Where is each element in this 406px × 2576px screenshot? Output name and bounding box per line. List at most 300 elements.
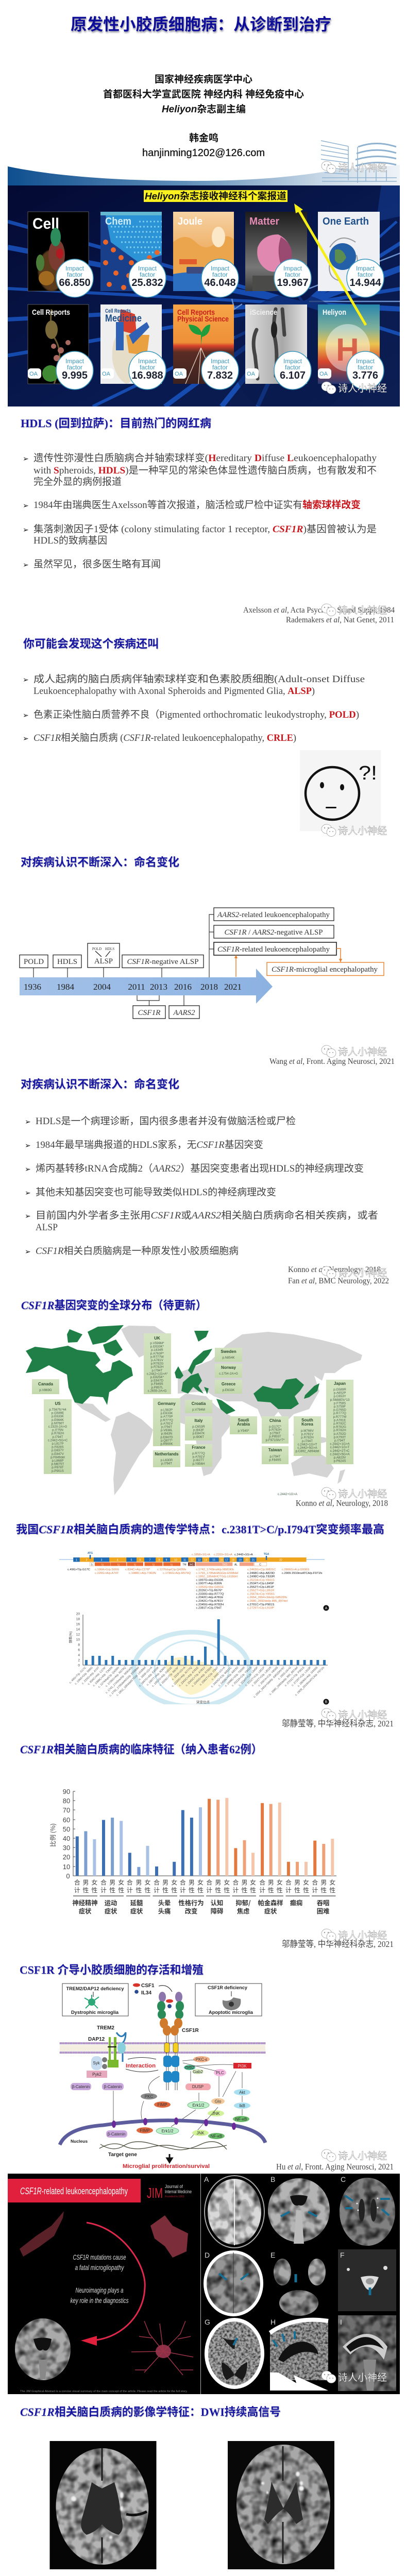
mutation box: US: p.T567fs*44 xyxy=(49,1408,66,1412)
box labels: AARS2 xyxy=(173,1009,195,1017)
x axis labels: c. 2468C>A/p. A823D xyxy=(218,1666,239,1687)
y axis labels xyxy=(63,1788,70,1880)
mutation box: Japan: p.R777Q xyxy=(333,1412,346,1415)
references: HDLS xyxy=(243,606,395,624)
cover: Cell Reports xyxy=(28,304,89,384)
box labels: POLD xyxy=(92,947,102,951)
impact factor badges: Impact xyxy=(211,358,230,365)
MRI panel D xyxy=(204,2250,263,2316)
box labels: CSF1R / AARS2-negative ALSP xyxy=(225,928,323,937)
mutation boxes: UK, Sweden, Norway, Greece, Canada xyxy=(32,1333,242,1394)
MRI panel C xyxy=(340,2175,395,2246)
deficiency box: CSF1R: Apoptotic microglia xyxy=(209,2010,253,2015)
MRI panel B: B xyxy=(270,2175,275,2183)
watermarks: 诗人小神经 xyxy=(338,1486,387,1500)
mutation boxes: Saudi Arabia, China, Taiwan, South Korea: p.P855T xyxy=(269,1435,281,1438)
mutation boxes: Saudi Arabia, China, Taiwan, South Korea: p.F849S xyxy=(269,1459,281,1462)
group labels: 认知 xyxy=(211,1898,223,1907)
mutation boxes: Saudi Arabia, China, Taiwan, South Korea: p.A781V xyxy=(301,1433,314,1436)
connector lines xyxy=(33,914,214,1006)
TREM2 and DAP12: Syk xyxy=(93,2061,100,2065)
heading: naming changes: 对疾病认识不断深入：命名变化 xyxy=(21,856,179,869)
impact factor badges xyxy=(56,259,384,389)
mutation box: US: p.P901S xyxy=(52,1469,64,1473)
mutation boxes: Saudi Arabia, China, Taiwan, South Korea: p.G17C* xyxy=(269,1425,281,1429)
OA badges: OA xyxy=(102,371,111,377)
impact factor badges: Impact xyxy=(138,358,157,365)
impact factor badges: factor xyxy=(358,271,373,278)
x axis labels: c. 1907T>A/p. I636N xyxy=(146,1666,166,1686)
mutation boxes: UK, Sweden, Norway, Greece, Canada: Canada xyxy=(38,1382,53,1386)
mutation boxes: UK, Sweden, Norway, Greece, Canada: p.A781V xyxy=(151,1359,164,1362)
x axis labels: c. 2026C>T/p. R676* xyxy=(159,1666,180,1687)
y axis labels: 8 xyxy=(78,1643,80,1647)
group labels: 神经精神 xyxy=(72,1898,98,1907)
mutation boxes: UK, Sweden, Norway, Greece, Canada: c.1754-2A>G xyxy=(219,1372,238,1376)
impact factor badges: Impact xyxy=(356,265,375,272)
impact factor badges: Impact xyxy=(211,265,230,272)
group labels: 障碍 xyxy=(211,1906,223,1916)
mutation lists: c.2498C>G/p.T833R xyxy=(247,1575,275,1579)
group labels: 抑郁/ xyxy=(235,1898,251,1907)
y axis labels: 16 xyxy=(76,1623,80,1626)
panel: journal covers xyxy=(8,185,402,417)
bullet list: other names: ➢ xyxy=(23,711,29,720)
mutation box: US: c.2442+5G>C xyxy=(48,1438,68,1442)
mutation boxes: Germany, Netherlands, Croatia, Italy, France: p.A781V xyxy=(161,1422,173,1426)
bullet list: other names: Leukoencephalopathy with Axonal Spheroids and Pigmented Glia, ALSP) xyxy=(33,686,315,697)
y axis labels: 30 xyxy=(63,1844,70,1852)
start and stop markers: TGA xyxy=(264,1553,269,1556)
x axis labels: c. 2498C>G/p. T833R xyxy=(225,1666,246,1688)
protein domain bar: Ig xyxy=(153,1563,155,1566)
axes xyxy=(83,1615,328,1665)
mutation boxes: Germany, Netherlands, Croatia, Italy, France xyxy=(153,1398,212,1467)
mutation boxes: Germany, Netherlands, Croatia, Italy, France: p.V784M xyxy=(192,1408,205,1412)
mutation lists: c.2552T>C/p.L851P xyxy=(247,1586,274,1589)
x axis labels: c. 2342C>T/p. A781V xyxy=(185,1666,206,1687)
mutation lists: c.2463G>C/p.W821C xyxy=(247,1568,276,1571)
cover: Cell Reports Medicine: Cell Reports xyxy=(105,308,131,314)
box labels: CSF1R xyxy=(138,1009,161,1017)
signalling molecules: PKC-ε xyxy=(196,2057,208,2062)
start and stop markers: c.2442+1G>A xyxy=(234,1553,253,1556)
mutation boxes: UK, Sweden, Norway, Greece, Canada: p.E847D xyxy=(151,1379,164,1383)
watermarks: 诗人小神经 xyxy=(338,1044,387,1058)
reference: Wang 2021: Wang et al, Front. Aging Neurosci, 2021 xyxy=(269,1057,395,1066)
x axis labels: c. 2319+1G>A xyxy=(172,1666,187,1681)
bullet list: naming: 烯丙基转移tRNA合成酶2（AARS2）基因突变患者出现HDLS的神经病理改变 xyxy=(36,1163,364,1174)
coronal brain xyxy=(15,2318,71,2380)
mutation lists: c.2654_2654+3del/p.G852Dfs xyxy=(247,1596,287,1599)
year labels: 2016 xyxy=(174,982,192,992)
box labels: CSF1R-microglial encephalopathy xyxy=(272,965,378,974)
MRI panel I: I xyxy=(340,2318,342,2326)
mutation box: Japan: p.R782H xyxy=(333,1429,346,1432)
cover: Matter xyxy=(245,212,307,291)
signalling molecules: Akt xyxy=(239,2090,246,2095)
watermarks: 诗人小神经 xyxy=(338,603,387,617)
protein domain bar: S xyxy=(91,1563,93,1566)
bullet list: naming: 其他未知基因突变也可能导致类似HDLS的神经病理改变 xyxy=(36,1187,276,1198)
mutation lists: c.220G>A/p.A74T xyxy=(95,1572,119,1575)
impact factor badges: Impact xyxy=(65,358,84,365)
CSF1R receptor xyxy=(157,1992,184,2090)
y axis labels: 70 xyxy=(63,1806,70,1814)
mutation boxes: UK, Sweden, Norway, Greece, Canada: p.V869G xyxy=(39,1388,52,1392)
mutation boxes: UK, Sweden, Norway, Greece, Canada: Greece xyxy=(222,1382,236,1386)
x axis labels: c. 2534T>C/p. L845P xyxy=(238,1666,259,1687)
mutation boxes: UK, Sweden, Norway, Greece, Canada: p.E633K xyxy=(223,1388,235,1392)
mutation box: Japan xyxy=(326,1380,353,1464)
exon bar: 14 xyxy=(204,1559,207,1562)
mutation boxes: UK, Sweden, Norway, Greece, Canada: p.N854K xyxy=(222,1356,235,1360)
heading: other names: 你可能会发现这个疾病还叫 xyxy=(23,637,159,650)
mutation box: Japan: c.2442+1G>T xyxy=(330,1446,350,1449)
box labels: HDLS xyxy=(105,947,114,951)
signalling molecules: PLC xyxy=(216,2071,224,2075)
references: HDLS: Axelsson et al, Acta Psychiatr Scand Suppl, 1984 xyxy=(243,606,395,615)
bullet list: other names: 成人起病的脑白质病伴轴索球样变和色素胶质细胞(Adult-onset Diffuse xyxy=(33,673,365,685)
MRI panel C: C xyxy=(341,2175,346,2183)
signalling molecules: Gab2 xyxy=(193,2070,203,2074)
mutation box: US: p.P878T xyxy=(52,1466,64,1469)
x axis labels: c. 1858+1G>A xyxy=(138,1666,154,1681)
MRI panel F xyxy=(338,2249,396,2311)
impact factor badges: 3.776 xyxy=(352,370,378,381)
blue swoosh footer of title slide xyxy=(8,165,400,185)
DWI scan: Karolinska case xyxy=(228,2441,334,2569)
mutation boxes: Germany, Netherlands, Croatia, Italy, France: p.C653R xyxy=(192,1425,205,1429)
y axis labels: 20 xyxy=(76,1613,80,1616)
arrow: yellow pointer to Heliyon xyxy=(294,204,366,325)
mutation lists: c.1276dupC/p.Q426fs xyxy=(157,1568,186,1571)
x axis labels: c. 2345G>A/p. R782H xyxy=(191,1666,213,1688)
year labels: 2004 xyxy=(93,982,111,992)
cover: Chem: Chem xyxy=(105,216,131,227)
OA badges: OA xyxy=(319,371,328,377)
year labels: 2018 xyxy=(200,982,218,992)
signalling molecules: IkB xyxy=(239,2104,245,2108)
mutation boxes: Germany, Netherlands, Croatia, Italy, France: France xyxy=(192,1445,206,1450)
x axis labels: c. 220G>A/p. A74T xyxy=(81,1666,100,1685)
y axis labels: 10 xyxy=(63,1863,70,1871)
reference: Zou 2021: 邬静莹等, 中华神经科杂志, 2021 xyxy=(282,1939,394,1949)
mutation lists: c.2567A>C/p.Y856S xyxy=(247,1593,275,1596)
group labels: 症状 xyxy=(264,1906,277,1916)
group labels: 焦虑 xyxy=(237,1906,249,1916)
bullet list: naming: ALSP xyxy=(36,1222,58,1233)
panel: JIM graphical abstract xyxy=(8,2174,400,2394)
group labels: 性格行为 xyxy=(178,1898,204,1907)
mutation boxes: UK, Sweden, Norway, Greece, Canada: p.R777W xyxy=(150,1355,164,1359)
mutation lists: c.2522A>C/p.Y841S xyxy=(247,1579,275,1582)
DWI scan: Xuanwu case xyxy=(49,2441,157,2569)
mutation boxes: Saudi Arabia, China, Taiwan, South Korea: p.R782H xyxy=(269,1428,281,1432)
x axis labels: c. 196A>G/p. S66G xyxy=(74,1666,94,1686)
y axis labels xyxy=(76,1613,80,1667)
y axis labels: 20 xyxy=(63,1853,70,1861)
group labels: 头痛 xyxy=(158,1906,171,1916)
red title banner xyxy=(8,2179,141,2202)
DNA wireframe xyxy=(20,2211,64,2257)
CT panel G: G xyxy=(205,2318,210,2326)
group labels: 吞咽 xyxy=(317,1898,329,1907)
CT panel H xyxy=(270,2318,328,2391)
deficiency box: TREM2/DAP12: TREM2/DAP12 deficiency xyxy=(66,1986,124,1991)
mutation box: Japan: p.P824S xyxy=(334,1460,346,1463)
protein domain bar: TKD xyxy=(222,1563,227,1566)
CT panel H: H xyxy=(270,2318,276,2326)
nuclear proteins: β-Catenin xyxy=(108,2132,125,2137)
mutation boxes: UK, Sweden, Norway, Greece, Canada: p.R782G xyxy=(151,1362,164,1366)
cover: Cell Reports Physical Science: Physical Science xyxy=(177,315,229,324)
x axis labels: c. 1897G>A/p. E633K xyxy=(139,1666,160,1687)
mutation lists xyxy=(67,1568,323,1610)
mutation frequency bar chart xyxy=(68,1613,329,1706)
impact factor badges: Impact xyxy=(138,265,157,272)
mutation boxes: Saudi Arabia, China, Taiwan, South Korea: c.2442+1G>T xyxy=(298,1443,317,1446)
group labels: 改变 xyxy=(185,1906,197,1916)
y axis labels: 6 xyxy=(78,1649,80,1652)
cover: Cell Reports Medicine: Medicine xyxy=(105,313,142,324)
heading: DWI: CSF1R相关脑白质病的影像学特征：DWI持续高信号 xyxy=(20,2405,281,2418)
ligand legend xyxy=(133,1983,172,1996)
mutation boxes: Saudi Arabia, China, Taiwan, South Korea: South xyxy=(301,1418,313,1422)
bullet list: naming: 目前国内外学者多主张用 CSF1R或AARS2相关脑白质病命名相关疾病，或者 xyxy=(36,1210,378,1221)
signalling molecules: NF-κB xyxy=(235,2117,247,2122)
mutation box: Japan: c.2442+1G>A xyxy=(330,1443,350,1446)
impact factor badges: 14.944 xyxy=(349,277,381,289)
mutation boxes: Germany, Netherlands, Croatia, Italy, France: Italy xyxy=(194,1418,203,1423)
mutation boxes: Germany, Netherlands, Croatia, Italy, France: p.L630R xyxy=(161,1459,173,1462)
impact factor badges: Impact xyxy=(283,265,302,272)
exon bar: 4 xyxy=(117,1559,119,1562)
exon bar: 16 xyxy=(220,1559,223,1562)
group labels: 困难 xyxy=(317,1906,329,1916)
bullet list: naming: ➢ xyxy=(25,1142,31,1150)
MRI panel I xyxy=(338,2315,396,2391)
gene mutation diagram xyxy=(59,1552,329,1611)
mutation box: Japan: p.F758S xyxy=(334,1401,346,1405)
cover: Matter: Matter xyxy=(249,216,279,227)
mutation box: US: p.F828S xyxy=(52,1446,64,1449)
mutation boxes: Germany, Netherlands, Croatia, Italy, France: p.R777Q xyxy=(192,1452,205,1455)
interaction label xyxy=(126,2058,158,2072)
MRI panel A xyxy=(204,2175,264,2248)
mutation boxes: Germany, Netherlands, Croatia, Italy, France: p.I843F xyxy=(193,1429,204,1432)
mutation lists: c.1952G>A/p.G651E xyxy=(196,1586,224,1589)
light rays xyxy=(8,222,402,406)
mutation box: US: p.G589E xyxy=(52,1412,64,1415)
x axis labels: c. 1736G>A/p. R579Q xyxy=(105,1666,127,1688)
nuclear proteins xyxy=(71,2117,236,2144)
watermarks: 诗人小神经 xyxy=(338,1707,387,1721)
impact factor badges: 46.048 xyxy=(204,277,236,289)
x axis labels: c. 1276dupC/p. Q426fs xyxy=(98,1666,120,1689)
exon bar: 22 xyxy=(279,1559,282,1562)
JIM logo: Journal of xyxy=(165,2184,183,2189)
y axis labels: 40 xyxy=(63,1835,70,1842)
cover: Heliyon: Heliyon xyxy=(323,308,346,317)
cover: Joule xyxy=(173,212,234,291)
mutation boxes: Saudi Arabia, China, Taiwan, South Korea: p.F971Sfs*7* xyxy=(266,1438,285,1442)
mutation frequency bar chart: 突变位点 xyxy=(196,1700,210,1704)
bullet list: HDLS: with Spheroids, HDLS)是一种罕见的常染色体显性遗传脑白质病，也有散发和不 xyxy=(33,465,377,476)
protein domain bar: C xyxy=(259,1563,261,1566)
cover: Chem xyxy=(100,212,162,291)
clinical features bar chart xyxy=(48,1788,336,1916)
mutation lists: c.2909 2910insATCA/p.F971fs xyxy=(282,1572,323,1575)
mutation boxes: Germany, Netherlands, Croatia, Italy, France: p.I827T xyxy=(193,1459,204,1462)
group labels: 运动 xyxy=(105,1898,117,1907)
mutation boxes: Saudi Arabia, China, Taiwan, South Korea: p.Y540* xyxy=(238,1429,249,1433)
mutation box: US: p.D837Y xyxy=(52,1449,64,1452)
x axis labels: c. 2522A>C/p. Y841S xyxy=(231,1666,252,1687)
exon bar: 2 xyxy=(86,1559,88,1562)
mutation lists: c.2330G>A/p.R777Q xyxy=(196,1593,224,1596)
OA badges: OA xyxy=(29,371,38,377)
x axis labels: c. 2680_2692del/p. 895_897del xyxy=(269,1666,299,1696)
group labels: 症状 xyxy=(79,1906,92,1916)
mutation boxes: Germany, Netherlands, Croatia, Italy, France: Croatia xyxy=(192,1401,206,1406)
axes xyxy=(73,1791,336,1876)
deficiency box: TREM2/DAP12 xyxy=(62,1984,128,2016)
bullet list: naming: 1984年最早瑞典报道的HDLS家系，无CSF1R基因突变 xyxy=(36,1139,263,1150)
signalling molecules: Grb2 xyxy=(185,2065,194,2070)
exon bar: 1 xyxy=(76,1559,77,1562)
mutation box: US: p.M766T xyxy=(52,1421,64,1425)
pathway arrows xyxy=(113,2060,242,2138)
start and stop markers: c.2319+1G>A xyxy=(214,1553,232,1556)
x axis labels: c. 1852_1854delCTG/p. L618del xyxy=(116,1666,146,1697)
mutation box: Japan: c.2442+5G>A xyxy=(330,1452,350,1456)
MRI panel F: F xyxy=(340,2251,345,2259)
mutation lists: c.1742_1743insA/p.N581Kfs xyxy=(196,1568,234,1571)
x axis labels: c. 2654_2654+3del/p. G852Dfs*97 xyxy=(253,1666,285,1699)
bullet list: other names xyxy=(23,673,365,743)
group labels: 延髓 xyxy=(130,1898,143,1907)
mutation boxes: Saudi Arabia, China, Taiwan, South Korea: Korea xyxy=(301,1422,313,1427)
mutation box: Japan: p.R782C xyxy=(333,1422,346,1426)
signalling molecules: JNK xyxy=(212,2111,220,2116)
mutation frequency bar chart: B xyxy=(325,1700,328,1704)
protein wireframe xyxy=(150,2215,188,2258)
mutation lists: c.834C>A/p.C278* xyxy=(125,1568,150,1571)
x axis labels: c. 2806G>A/p. G936S xyxy=(297,1666,318,1688)
mutation box: US: p.L868P xyxy=(52,1459,64,1463)
mutation box: US: p.R782H xyxy=(52,1432,64,1435)
impact factor badges: Impact xyxy=(283,358,302,365)
exon bar: 8 xyxy=(159,1559,160,1562)
mutation box: Japan: p.S688Efs*13 xyxy=(330,1398,350,1402)
deficiency box: CSF1R xyxy=(195,1984,262,2016)
mutation box: Japan: c.2442+2T>C xyxy=(330,1449,350,1453)
impact factor badges: 6.107 xyxy=(280,370,306,381)
mutation boxes: UK, Sweden, Norway, Greece, Canada: Sweden xyxy=(221,1349,236,1354)
x axis labels: c. 49G>T/p. G17C xyxy=(69,1666,87,1684)
OA badges: OA xyxy=(175,371,183,377)
exon bar: 21 xyxy=(252,1559,255,1562)
x axis labels: c. 2330G>A/p. R777Q xyxy=(171,1666,193,1688)
signalling molecules: β-Catenin xyxy=(72,2084,90,2089)
OA badges: OA xyxy=(247,371,256,377)
nuclear proteins: NF-κB xyxy=(211,2134,222,2139)
mutation lists: c.2806G>A p.G936S xyxy=(282,1568,309,1571)
mutation box: Japan: p.A792D xyxy=(333,1432,346,1436)
mutation boxes: UK, Sweden, Norway, Greece, Canada: p.F849S xyxy=(151,1382,163,1386)
mutation boxes: Saudi Arabia, China, Taiwan, South Korea: p.I794T xyxy=(302,1439,313,1443)
year labels: 1984 xyxy=(57,982,74,992)
exon bar: 10 xyxy=(174,1559,177,1562)
year labels: 2011 xyxy=(128,982,145,992)
x axis labels: c. 2552T>C/p. L851P xyxy=(245,1666,266,1687)
clinical features bar chart: 比例 (%) xyxy=(48,1823,57,1847)
MRI panel B xyxy=(268,2175,330,2244)
cover: Heliyon xyxy=(318,304,380,384)
world map of CSF1R mutations: c.2442+1G>A xyxy=(278,1493,298,1496)
mutation lists: c.2342C>T/p.A781V xyxy=(196,1600,223,1603)
JIM logo: Internal Medicine xyxy=(165,2189,192,2194)
watermarks: 诗人小神经 xyxy=(338,2148,387,2162)
bullet list: naming: ➢ xyxy=(25,1118,31,1126)
start and stop markers xyxy=(88,1552,269,1560)
x axis labels: c. 2552T>G/p. L851R xyxy=(251,1666,272,1687)
cover: Cell Reports Physical Science xyxy=(173,304,234,384)
protein domain bar: TM xyxy=(182,1563,187,1566)
MRI panel E: E xyxy=(270,2251,275,2259)
x axis labels: c. 834C>A/p. C278* xyxy=(87,1666,107,1686)
JIM logo: JIM xyxy=(147,2185,163,2201)
y axis labels: 4 xyxy=(78,1654,80,1657)
mutation box: Japan: p.K793T xyxy=(334,1435,346,1439)
x axis labels: c. 2442+1G>A xyxy=(211,1666,226,1681)
mutation lists: c.1897G>A/p.E633K xyxy=(196,1579,224,1582)
mutation boxes: Saudi Arabia, China, Taiwan, South Korea: c.2442+5G>A xyxy=(297,1446,317,1450)
bullet list: naming: CSF1R相关白质脑病是一种原发性小胶质细胞病 xyxy=(36,1245,239,1257)
cover: Cell Reports: Cell Reports xyxy=(32,308,70,317)
abstract statements: Neuroimaging plays a xyxy=(75,2286,124,2294)
y axis labels: 90 xyxy=(63,1788,70,1795)
y axis labels: 0 xyxy=(78,1664,80,1667)
mutation boxes: UK, Sweden, Norway, Greece, Canada: c.2655-2A>G xyxy=(148,1389,166,1393)
signalling molecules: FIMP xyxy=(157,2103,167,2107)
group labels: 症状 xyxy=(130,1906,143,1916)
impact factor badges: factor xyxy=(358,364,373,371)
mutation boxes: Germany, Netherlands, Croatia, Italy, France: p.Q877* xyxy=(161,1439,173,1443)
heading: global distribution: CSF1R基因突变的全球分布（待更新） xyxy=(21,1299,207,1312)
exon bar: 11 xyxy=(183,1559,186,1562)
bullet list: HDLS: HDLS的致病基因 xyxy=(33,535,107,546)
mutation box: Japan: p.C653Y xyxy=(333,1395,346,1398)
exon bar: 19 xyxy=(239,1559,242,1562)
watermarks: 诗人小神经 xyxy=(338,823,387,837)
mutation lists: c.2552T>G/p.L851R xyxy=(247,1589,274,1592)
interaction label: Interaction xyxy=(126,2063,156,2069)
CT panel G xyxy=(205,2318,264,2389)
mutation lists: c.1088C>A/p.T363N xyxy=(129,1572,156,1575)
box labels xyxy=(24,911,378,1017)
exon bar: 7 xyxy=(149,1559,151,1562)
mutation boxes: Saudi Arabia, China, Taiwan, South Korea: Taiwan xyxy=(268,1448,282,1452)
world map of CSF1R mutations xyxy=(26,1325,362,1496)
group labels: 症状 xyxy=(105,1906,117,1916)
mutation boxes: Saudi Arabia, China, Taiwan, South Korea: p.I794T xyxy=(270,1455,281,1459)
group rules xyxy=(73,1895,336,1896)
y axis labels: 0 xyxy=(66,1872,70,1880)
exon bar: 5 xyxy=(131,1559,132,1562)
x axis labels: c. 2567A>C/p. Y856S xyxy=(258,1666,279,1687)
